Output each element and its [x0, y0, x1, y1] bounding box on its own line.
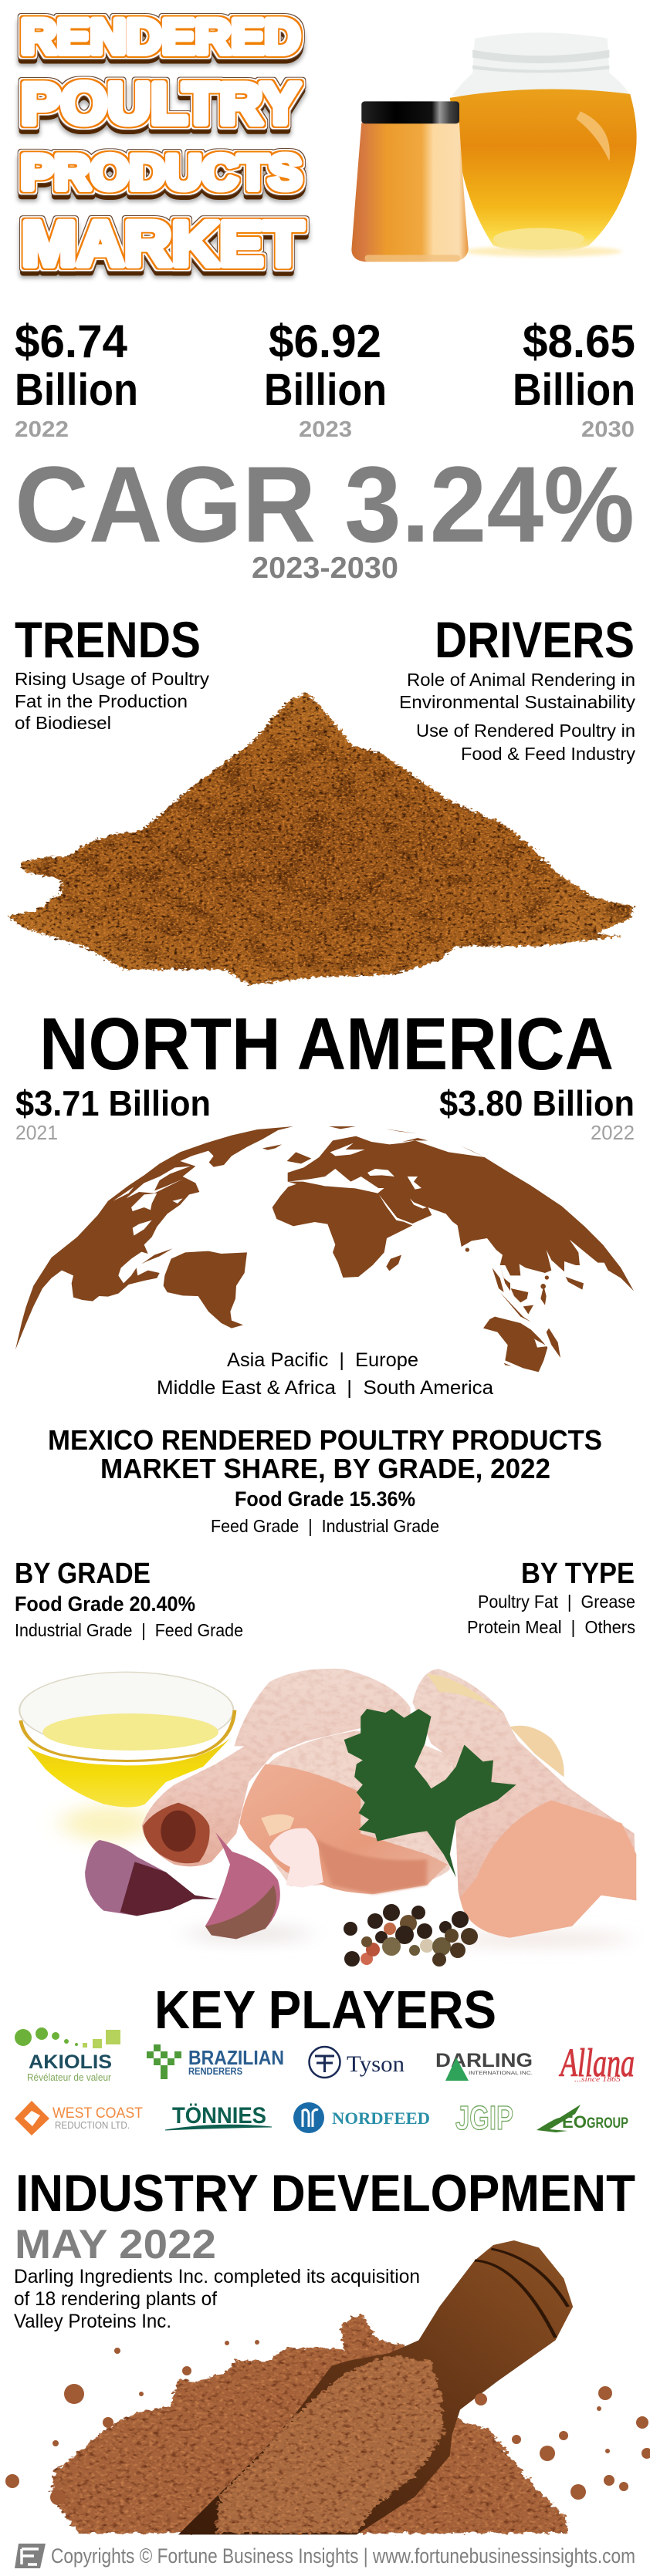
development text [14, 2266, 420, 2332]
stat: 2021 North America: $3.71 Billion [15, 1083, 211, 1123]
logo: KEO Group: EO [562, 2112, 587, 2132]
ground shadows [63, 1805, 630, 1946]
stat: 2021 North America [15, 1083, 211, 1144]
stat: 2023 market size: $6.92 [269, 316, 381, 367]
logo: Tyson: Tyson [347, 2051, 405, 2077]
panel: by grade: Industrial Grade | Feed Grade [15, 1620, 243, 1640]
world map [15, 1126, 634, 1372]
Mexico food grade share: Food Grade 15.36% [235, 1487, 415, 1511]
date: MAY 2022 [15, 2222, 216, 2267]
powder mound [52, 2313, 568, 2533]
logo: Allana: ...since 1865 [574, 2075, 621, 2083]
logo: West Coast Reduction: WEST COAST [52, 2105, 143, 2122]
heading: key players: KEY PLAYERS [154, 1980, 496, 2040]
logo: KEO Group: GROUP [587, 2115, 628, 2132]
driver text: Use of Rendered Poultry in [416, 721, 635, 741]
logo: Darling [435, 2050, 533, 2081]
stat: 2022 market size: $6.74 [15, 316, 128, 367]
stat: 2030 market size [513, 316, 635, 442]
other regions list: Asia Pacific | Europe [227, 1349, 418, 1371]
panel: trends [15, 611, 210, 733]
stat: 2023 market size: 2023 [299, 417, 352, 442]
panel: by type: Poultry Fat | Grease [478, 1592, 635, 1612]
logo: Nordfeed [293, 2102, 430, 2133]
stat: 2022 North America [439, 1083, 635, 1144]
trend text: Fat in the Production [15, 691, 188, 711]
panel: by type: Protein Meal | Others [467, 1617, 635, 1637]
panel: drivers [399, 611, 636, 764]
trend text [15, 669, 210, 733]
stat: 2022 market size [15, 316, 138, 442]
icon: front drumstick [412, 1669, 636, 1938]
logo: Akiolis: AKIOLIS [29, 2051, 112, 2073]
image: chicken, oil, garlic and pepper [19, 1669, 636, 1967]
logo: Brazilian Renderers [147, 2044, 284, 2079]
icon: bowl of oil [19, 1672, 235, 1807]
stat: 2023 market size: Billion [264, 365, 387, 415]
logo: Akiolis [15, 2027, 120, 2083]
image: powder pile [6, 693, 635, 985]
stat: 2022 market size: Billion [15, 365, 138, 415]
logo: JGIP: JGIP [455, 2099, 513, 2137]
stat: 2022 North America: 2022 [591, 1121, 635, 1144]
map seas and lakes [98, 1143, 547, 1348]
stat: 2030 market size: 2030 [581, 417, 635, 442]
stat: 2021 North America: 2021 [15, 1121, 58, 1144]
other regions list [157, 1349, 493, 1399]
other regions list: Middle East & Africa | South America [157, 1377, 493, 1399]
panel: by grade: BY GRADE [15, 1558, 151, 1590]
icon: garlic cloves [85, 1832, 280, 1939]
icon: small orange jar [351, 101, 469, 262]
title: POULTRY [21, 71, 300, 136]
development text: Darling Ingredients Inc. completed its acquisition [14, 2266, 420, 2287]
heading: North America: NORTH AMERICA [39, 1003, 614, 1085]
logo: Tyson [309, 2047, 405, 2078]
stat: 2023 market size [264, 316, 387, 442]
development text: of 18 rendering plants of [14, 2288, 217, 2310]
driver text: Food & Feed Industry [461, 744, 635, 764]
panel: by type [467, 1558, 635, 1637]
title [21, 10, 303, 279]
logo: Nordfeed: NORDFEED [332, 2108, 430, 2128]
stat: 2030 market size: $8.65 [523, 316, 635, 367]
logo: Brazilian Renderers: BRAZILIAN [188, 2046, 284, 2069]
heading: trends: TRENDS [15, 611, 201, 668]
panel: by grade: Food Grade 20.40% [15, 1592, 195, 1615]
wooden scoop [178, 2240, 573, 2534]
logo: West Coast Reduction [15, 2101, 143, 2135]
logo: Tonnies: TÖNNIES [172, 2103, 266, 2129]
trend text: of Biodiesel [15, 713, 111, 733]
icon: Fortune Business Insights logo [15, 2544, 46, 2568]
title: MARKET [22, 209, 303, 279]
driver text: Environmental Sustainability [399, 692, 636, 712]
driver text: Role of Animal Rendering in [407, 670, 635, 690]
development text: Valley Proteins Inc. [14, 2311, 171, 2332]
heading: Mexico market share: MEXICO RENDERED POULTRY PRODUCTS [48, 1424, 602, 1456]
bone end [143, 1803, 210, 1863]
logo: KEO Group [537, 2105, 628, 2132]
panel: by type: BY TYPE [521, 1558, 635, 1590]
stat: 2030 market size: Billion [513, 365, 635, 415]
powder in scoop [215, 2355, 444, 2533]
footer [15, 2544, 635, 2568]
logo: Akiolis: Révélateur de valeur [27, 2071, 112, 2083]
title: RENDERED [21, 10, 300, 64]
logo: Brazilian Renderers: RENDERERS [188, 2065, 242, 2077]
panel: by grade [15, 1558, 243, 1640]
image: wooden scoop with cocoa powder [5, 2240, 650, 2534]
stat: 2022 market size: 2022 [15, 417, 69, 442]
illustration: jars of rendered poultry fat [351, 32, 637, 262]
icon: peppercorns [344, 1904, 478, 1967]
heading: Mexico market share: MARKET SHARE, BY GRADE, 2022 [100, 1453, 550, 1484]
logo: Darling: DARLING [435, 2050, 533, 2071]
Mexico other grades: Feed Grade | Industrial Grade [211, 1516, 439, 1536]
trend text: Rising Usage of Poultry [15, 669, 210, 689]
powder particles [5, 2340, 650, 2505]
CAGR period: 2023-2030 [252, 552, 398, 585]
logo: West Coast Reduction: REDUCTION LTD. [55, 2119, 130, 2131]
icon: back drumstick [142, 1669, 411, 1866]
driver text [399, 670, 636, 764]
icon: parsley [344, 1709, 516, 1877]
logo: Darling: INTERNATIONAL INC. [469, 2071, 533, 2076]
title: PRODUCTS [21, 146, 302, 200]
CAGR headline: CAGR 3.24% [15, 444, 635, 565]
heading: Mexico market share [48, 1424, 602, 1484]
icon: large glass jar [450, 32, 637, 257]
icon: middle drumstick [239, 1730, 452, 1894]
stat: 2022 North America: $3.80 Billion [439, 1083, 635, 1123]
